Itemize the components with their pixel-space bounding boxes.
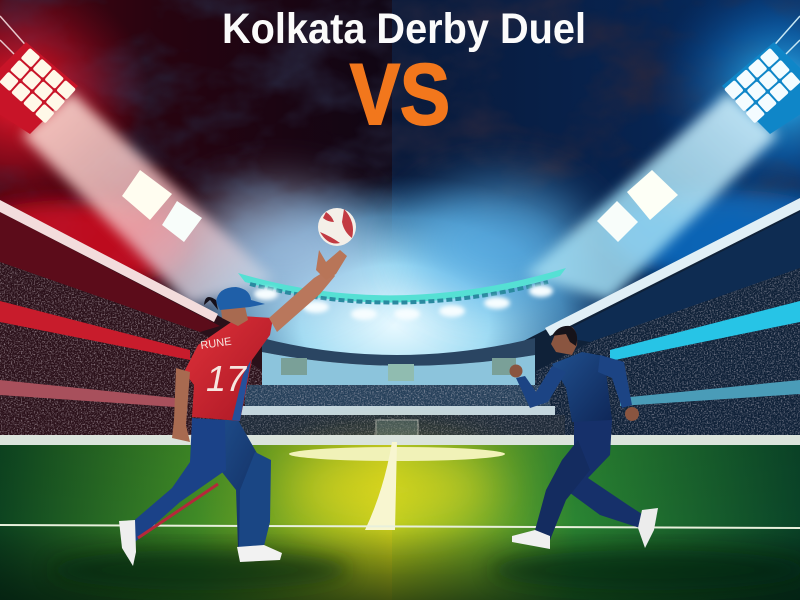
background sky split: [0, 0, 800, 440]
back leg: [205, 420, 268, 548]
batting pad: [239, 452, 271, 550]
right player: bowler in navy: [510, 326, 658, 549]
head: [551, 327, 577, 355]
far stand and roof: [235, 338, 565, 437]
left player: batter in red: RUNE: [200, 336, 232, 352]
secondary floodlight panels: [122, 170, 678, 242]
torso: [552, 352, 612, 422]
canopy ring lights: [238, 268, 566, 320]
left player: batter in red: [119, 250, 347, 566]
arms: [516, 366, 566, 408]
pitch: [0, 435, 800, 600]
ball: [318, 208, 356, 246]
floodlight beams: [22, 92, 778, 305]
centre stadium glow: [160, 175, 630, 475]
shoes: [119, 520, 136, 566]
goal: [376, 420, 418, 437]
right stadium stand: [392, 198, 800, 437]
head and cap: [220, 300, 248, 326]
shoes: [512, 530, 550, 549]
left floodlight: [0, 16, 78, 134]
legs: [566, 418, 648, 528]
VS heading: VS: [350, 47, 450, 143]
right floodlight: [722, 16, 800, 134]
raised arm: [269, 268, 335, 332]
number: 17: [206, 358, 248, 399]
red and blue corner glows: [0, 0, 800, 290]
left stadium stand: [0, 200, 392, 437]
front leg: [130, 418, 226, 542]
lower arm: [172, 368, 190, 442]
jersey: [184, 316, 273, 421]
title: Kolkata Derby Duel: [222, 5, 586, 53]
